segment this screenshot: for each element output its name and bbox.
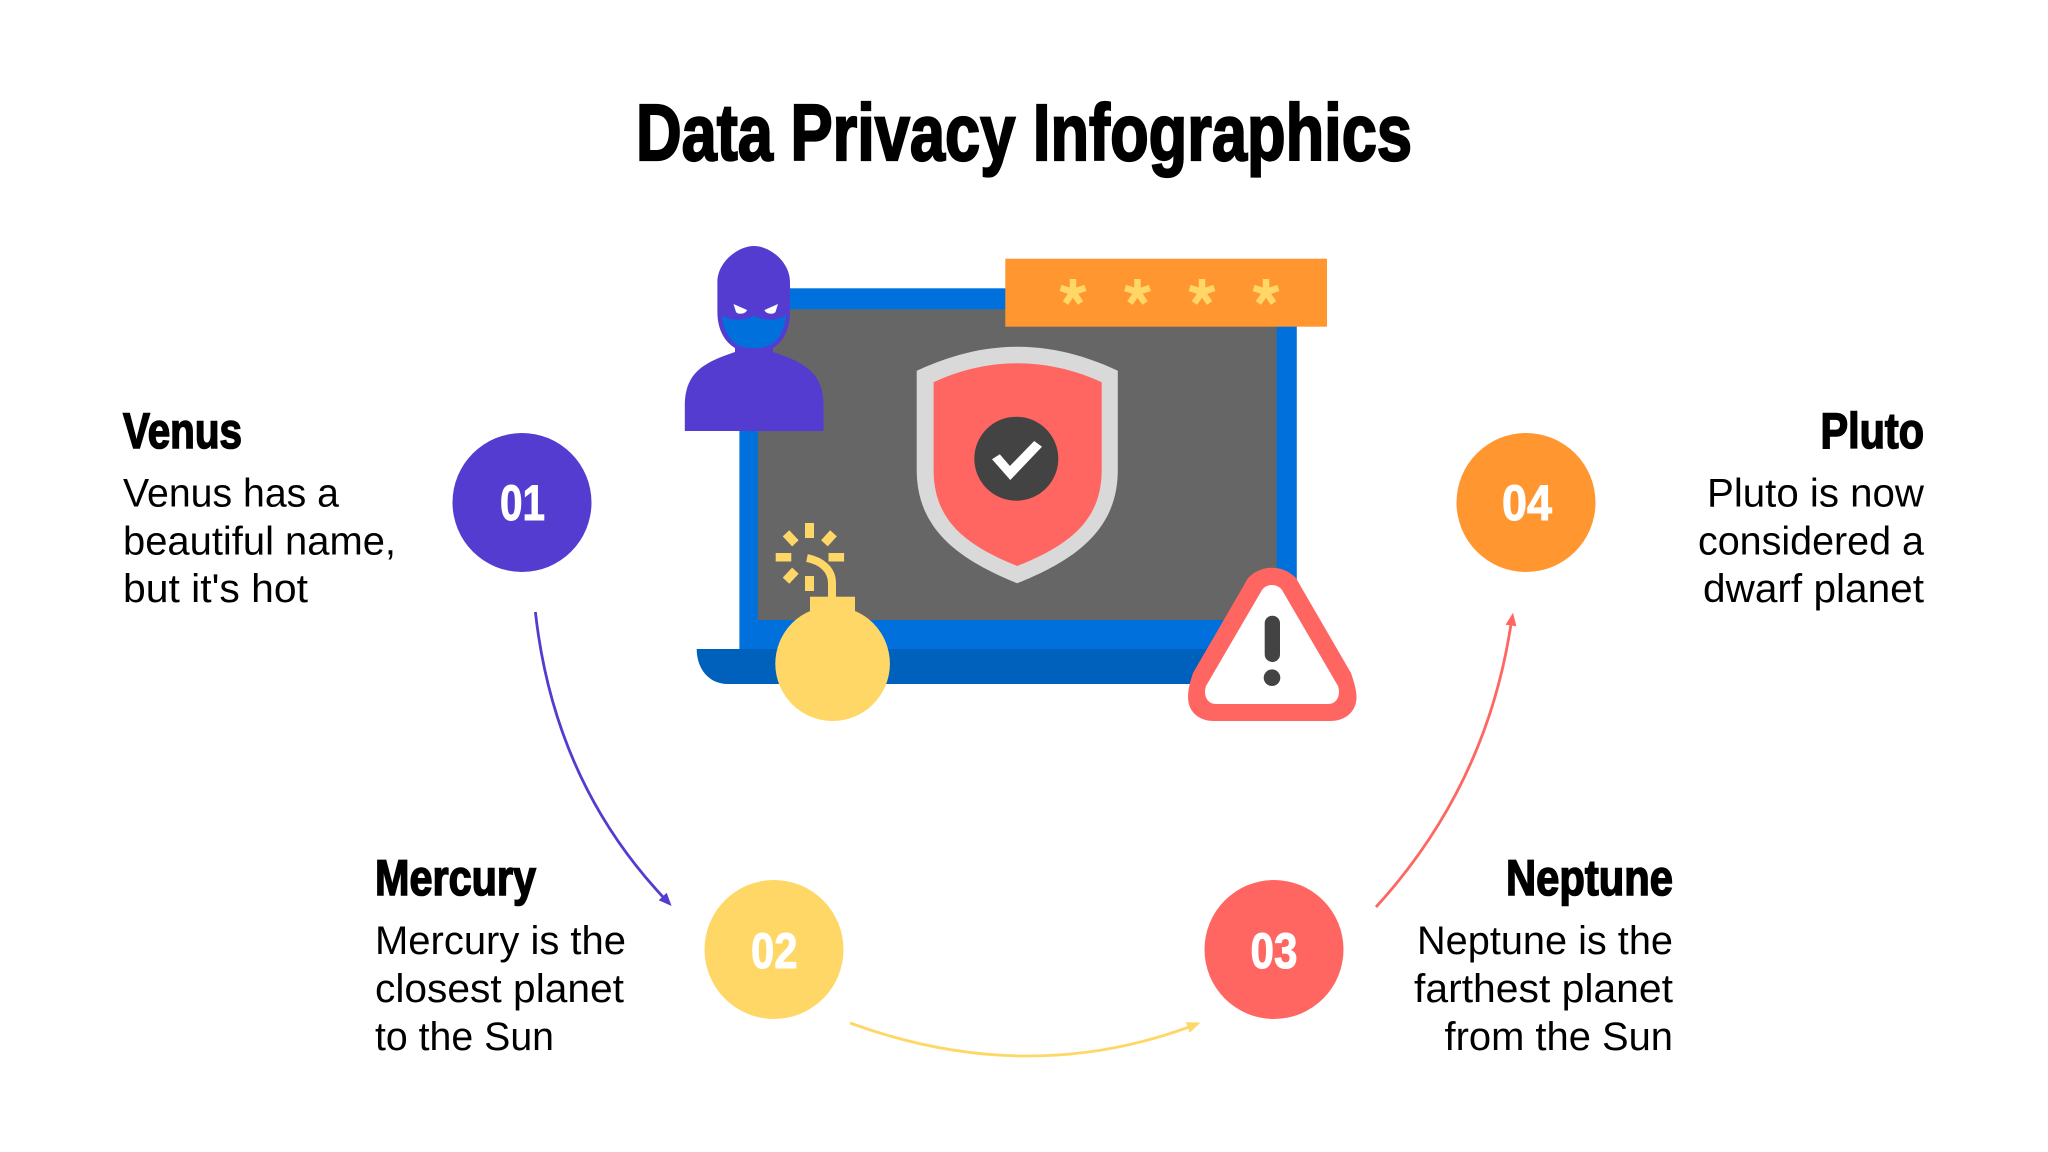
- icon: shield with check: [917, 347, 1118, 583]
- text: Mercury description: closest planet: [375, 967, 624, 1011]
- step 04: Pluto: [1456, 403, 1925, 611]
- heading: Pluto: Pluto: [1820, 403, 1924, 459]
- icon: password field: [1005, 259, 1327, 327]
- text: Pluto description: considered a: [1698, 519, 1925, 563]
- arrow: 01 to 02: [535, 612, 672, 906]
- step 03: Neptune: [1204, 850, 1673, 1059]
- laptop screen: [758, 309, 1277, 620]
- number circle 02: [704, 880, 844, 1019]
- number circle 04: 04: [1502, 475, 1552, 531]
- arrow: 03 to 04: [1376, 613, 1516, 907]
- laptop base: [697, 649, 1300, 684]
- text: Mercury description: [375, 919, 626, 1059]
- title: Data Privacy Infographics: [636, 88, 1412, 177]
- number circle 03: [1204, 880, 1344, 1019]
- step 02: Mercury: [375, 850, 844, 1059]
- text: Mercury description: Mercury is the: [375, 919, 626, 963]
- text: Venus description: but it's hot: [123, 567, 308, 611]
- central illustration: laptop with security icons: [685, 246, 1356, 721]
- text: Venus description: Venus has a: [123, 472, 340, 516]
- text: Neptune description: Neptune is the: [1417, 919, 1673, 963]
- number circle 02: 02: [751, 923, 798, 979]
- heading: Mercury: Mercury: [375, 850, 536, 906]
- heading: Venus: Venus: [123, 403, 242, 459]
- number circle 01: 01: [500, 475, 545, 531]
- icon: warning triangle: [1188, 568, 1356, 721]
- text: Pluto description: Pluto is now: [1707, 472, 1924, 516]
- text: Venus description: [123, 472, 396, 611]
- text: Neptune description: farthest planet: [1414, 967, 1673, 1011]
- text: Pluto description: dwarf planet: [1703, 567, 1924, 611]
- heading: Neptune: Neptune: [1506, 850, 1673, 906]
- icon: hacker: [685, 246, 824, 431]
- text: Neptune description: [1414, 919, 1673, 1059]
- text: Venus description: beautiful name,: [123, 519, 396, 563]
- text: Mercury description: to the Sun: [375, 1015, 554, 1059]
- icon: bomb: [775, 523, 890, 721]
- number circle 04: [1456, 433, 1596, 572]
- text: Pluto description: [1698, 472, 1925, 611]
- step 01: Venus: [123, 403, 592, 611]
- laptop screen frame: [739, 288, 1297, 649]
- arrow: 02 to 03: [850, 1022, 1200, 1056]
- text: Neptune description: from the Sun: [1444, 1015, 1673, 1059]
- number circle 03: 03: [1250, 923, 1298, 979]
- number circle 01: [452, 433, 592, 572]
